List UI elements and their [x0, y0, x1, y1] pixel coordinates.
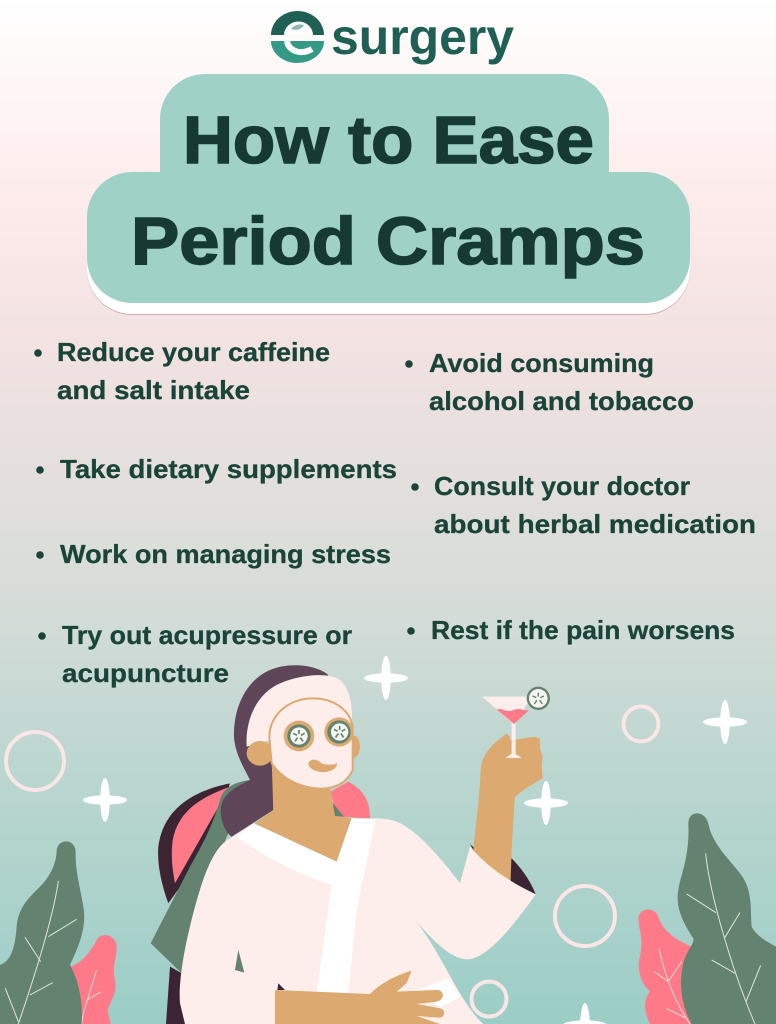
tip: alcohol and tobacco — [405, 348, 694, 416]
cuff — [417, 978, 461, 1007]
cocktail glass — [482, 687, 550, 758]
tip: alcohol and tobacco: alcohol and tobacco — [429, 386, 694, 416]
hair — [221, 665, 328, 837]
skin: neck and right ear — [255, 735, 360, 862]
tip: rest: Rest if the pain worsens — [431, 615, 735, 645]
lower arm and hand — [275, 971, 444, 1024]
wordmark: surgery — [331, 9, 514, 65]
woman in bathrobe with face mask holding a cocktail — [151, 665, 550, 1024]
raised arm and hand — [473, 733, 543, 882]
tip: alcohol and tobacco: Avoid consuming — [429, 348, 654, 378]
tip: acupressure: acupuncture — [62, 658, 229, 688]
left leaves — [0, 841, 117, 1024]
face mask — [269, 698, 353, 789]
tip: acupressure: Try out acupressure or — [62, 620, 352, 650]
right leaves — [638, 813, 776, 1024]
title line 1: How to Ease — [183, 103, 594, 178]
tip: acupressure — [38, 620, 352, 688]
tip: caffeine and salt: and salt intake — [57, 375, 250, 405]
tip: consult doctor: Consult your doctor — [434, 471, 690, 501]
decorative rings — [6, 706, 658, 1016]
icon: e emblem — [271, 11, 324, 63]
tip: caffeine and salt: Reduce your caffeine — [57, 337, 330, 367]
cucumber eye right — [324, 717, 354, 747]
left ear — [247, 741, 273, 766]
tip: consult doctor — [411, 471, 756, 539]
decorative sparkles — [83, 656, 747, 1024]
logo: esurgery — [271, 9, 514, 65]
chair — [158, 782, 370, 1024]
mouth — [308, 760, 337, 772]
towel — [151, 780, 250, 973]
bathrobe — [180, 818, 536, 1024]
headband — [246, 675, 352, 747]
robe collar — [237, 818, 376, 993]
title line 2: Period Cramps — [131, 204, 645, 279]
sleeve lining — [470, 844, 536, 894]
tip: caffeine and salt — [34, 337, 330, 405]
title panel — [87, 74, 690, 315]
tip: stress: Work on managing stress — [60, 539, 391, 569]
tip: supplements: Take dietary supplements — [60, 454, 397, 484]
robe fold — [235, 950, 244, 973]
tip: consult doctor: about herbal medication — [434, 509, 756, 539]
cucumber eye left — [284, 721, 314, 751]
